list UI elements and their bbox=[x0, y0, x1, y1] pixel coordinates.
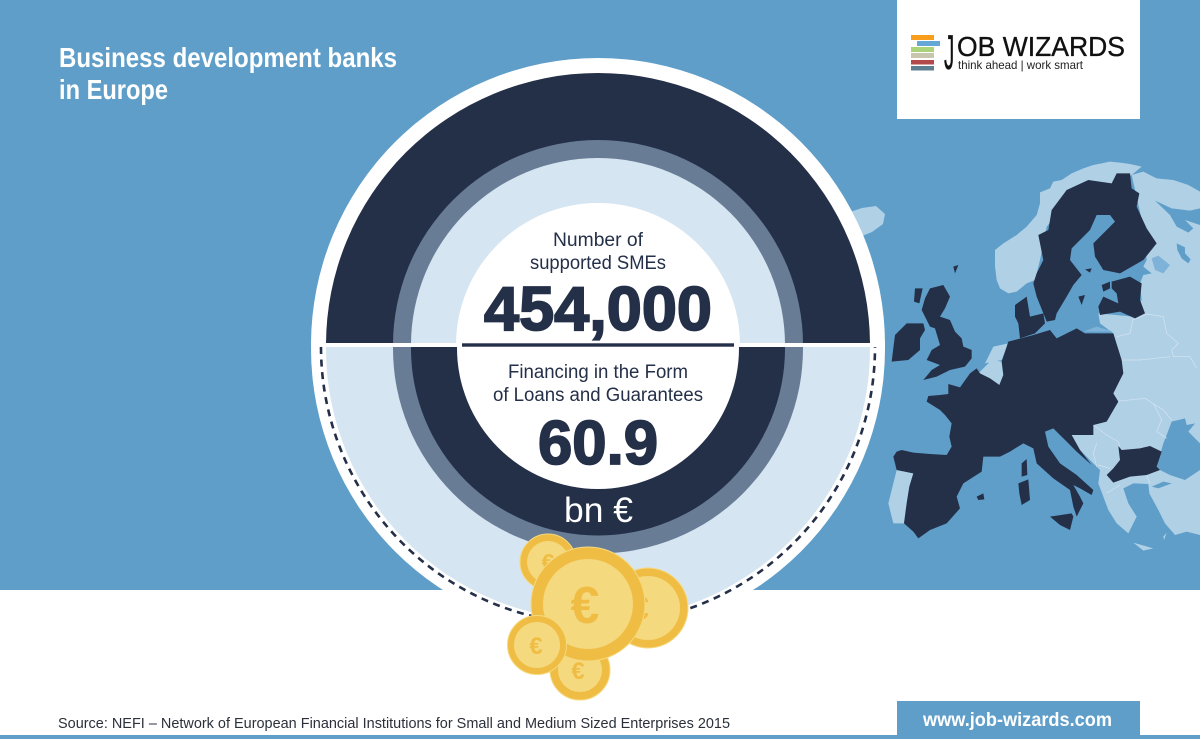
mainland Europe bbox=[893, 328, 1123, 538]
coin bottom: € bbox=[571, 658, 585, 685]
logo tagline: think ahead | work smart bbox=[958, 58, 1084, 72]
Corsica bbox=[1022, 459, 1027, 477]
blue background panel bbox=[0, 0, 1200, 590]
coin large centre: € bbox=[571, 577, 599, 635]
infographic circle bbox=[311, 58, 885, 636]
logo wordmark: J bbox=[944, 25, 954, 79]
value: 60.9: 60.9 bbox=[538, 409, 658, 478]
United Kingdom bbox=[922, 285, 972, 380]
member countries bbox=[892, 173, 1162, 538]
national borders bbox=[1093, 314, 1197, 493]
Denmark bbox=[1015, 297, 1045, 338]
coin bottom bbox=[550, 640, 610, 700]
seas and lakes bbox=[1152, 201, 1200, 488]
coin large centre bbox=[531, 547, 645, 661]
Balearic islands bbox=[977, 493, 984, 500]
white divider band bbox=[311, 343, 885, 347]
Bulgaria bbox=[1107, 446, 1162, 483]
source note: Source: NEFI – Network of European Financial Institutions for Small and Medium Sized Enterprises 2015 bbox=[58, 715, 730, 732]
non-member countries bbox=[888, 162, 1200, 551]
label: number of: Number of bbox=[553, 230, 644, 251]
label: loans and guarantees: of Loans and Guarantees bbox=[493, 385, 703, 406]
lakes and lagoons in pale blue bbox=[1083, 256, 1170, 332]
coin top left: € bbox=[542, 549, 555, 575]
Sweden and Finland bbox=[1033, 173, 1157, 322]
lower half of circle bbox=[311, 347, 885, 612]
coin lower left: € bbox=[529, 633, 543, 660]
label: financing: Financing in the Form bbox=[508, 362, 688, 383]
value: 454,000: 454,000 bbox=[484, 275, 712, 344]
logo wordmark: OB WIZARDS bbox=[957, 31, 1125, 62]
coin top left bbox=[520, 534, 576, 590]
dashed outline bbox=[321, 347, 875, 624]
unit: bn euro: bn € bbox=[564, 491, 633, 530]
Sicily bbox=[1050, 513, 1073, 530]
label: supported SMEs: supported SMEs bbox=[530, 253, 666, 274]
Sardinia bbox=[1018, 479, 1030, 505]
dark divider line bbox=[462, 343, 734, 347]
logo box bbox=[897, 0, 1140, 119]
coin lower left bbox=[508, 616, 566, 674]
Baltic islands bbox=[1078, 295, 1085, 305]
title: Business development banks bbox=[59, 42, 397, 73]
title: in Europe bbox=[59, 74, 168, 105]
map of Europe bbox=[850, 162, 1200, 551]
Estonia and Latvia bbox=[1098, 277, 1145, 318]
website box: www.job-wizards.com bbox=[922, 710, 1112, 731]
logo wordmark bbox=[944, 25, 1125, 79]
Ireland bbox=[892, 323, 925, 362]
bottom strip bbox=[0, 735, 1200, 739]
coin right bbox=[608, 568, 688, 648]
website box bbox=[897, 701, 1140, 735]
logo book stack icon bbox=[911, 35, 940, 70]
upper half of circle bbox=[311, 58, 885, 343]
coin right: € bbox=[631, 590, 649, 626]
Iceland fragment bbox=[850, 206, 885, 236]
title bbox=[59, 42, 397, 105]
coins bbox=[508, 534, 688, 700]
